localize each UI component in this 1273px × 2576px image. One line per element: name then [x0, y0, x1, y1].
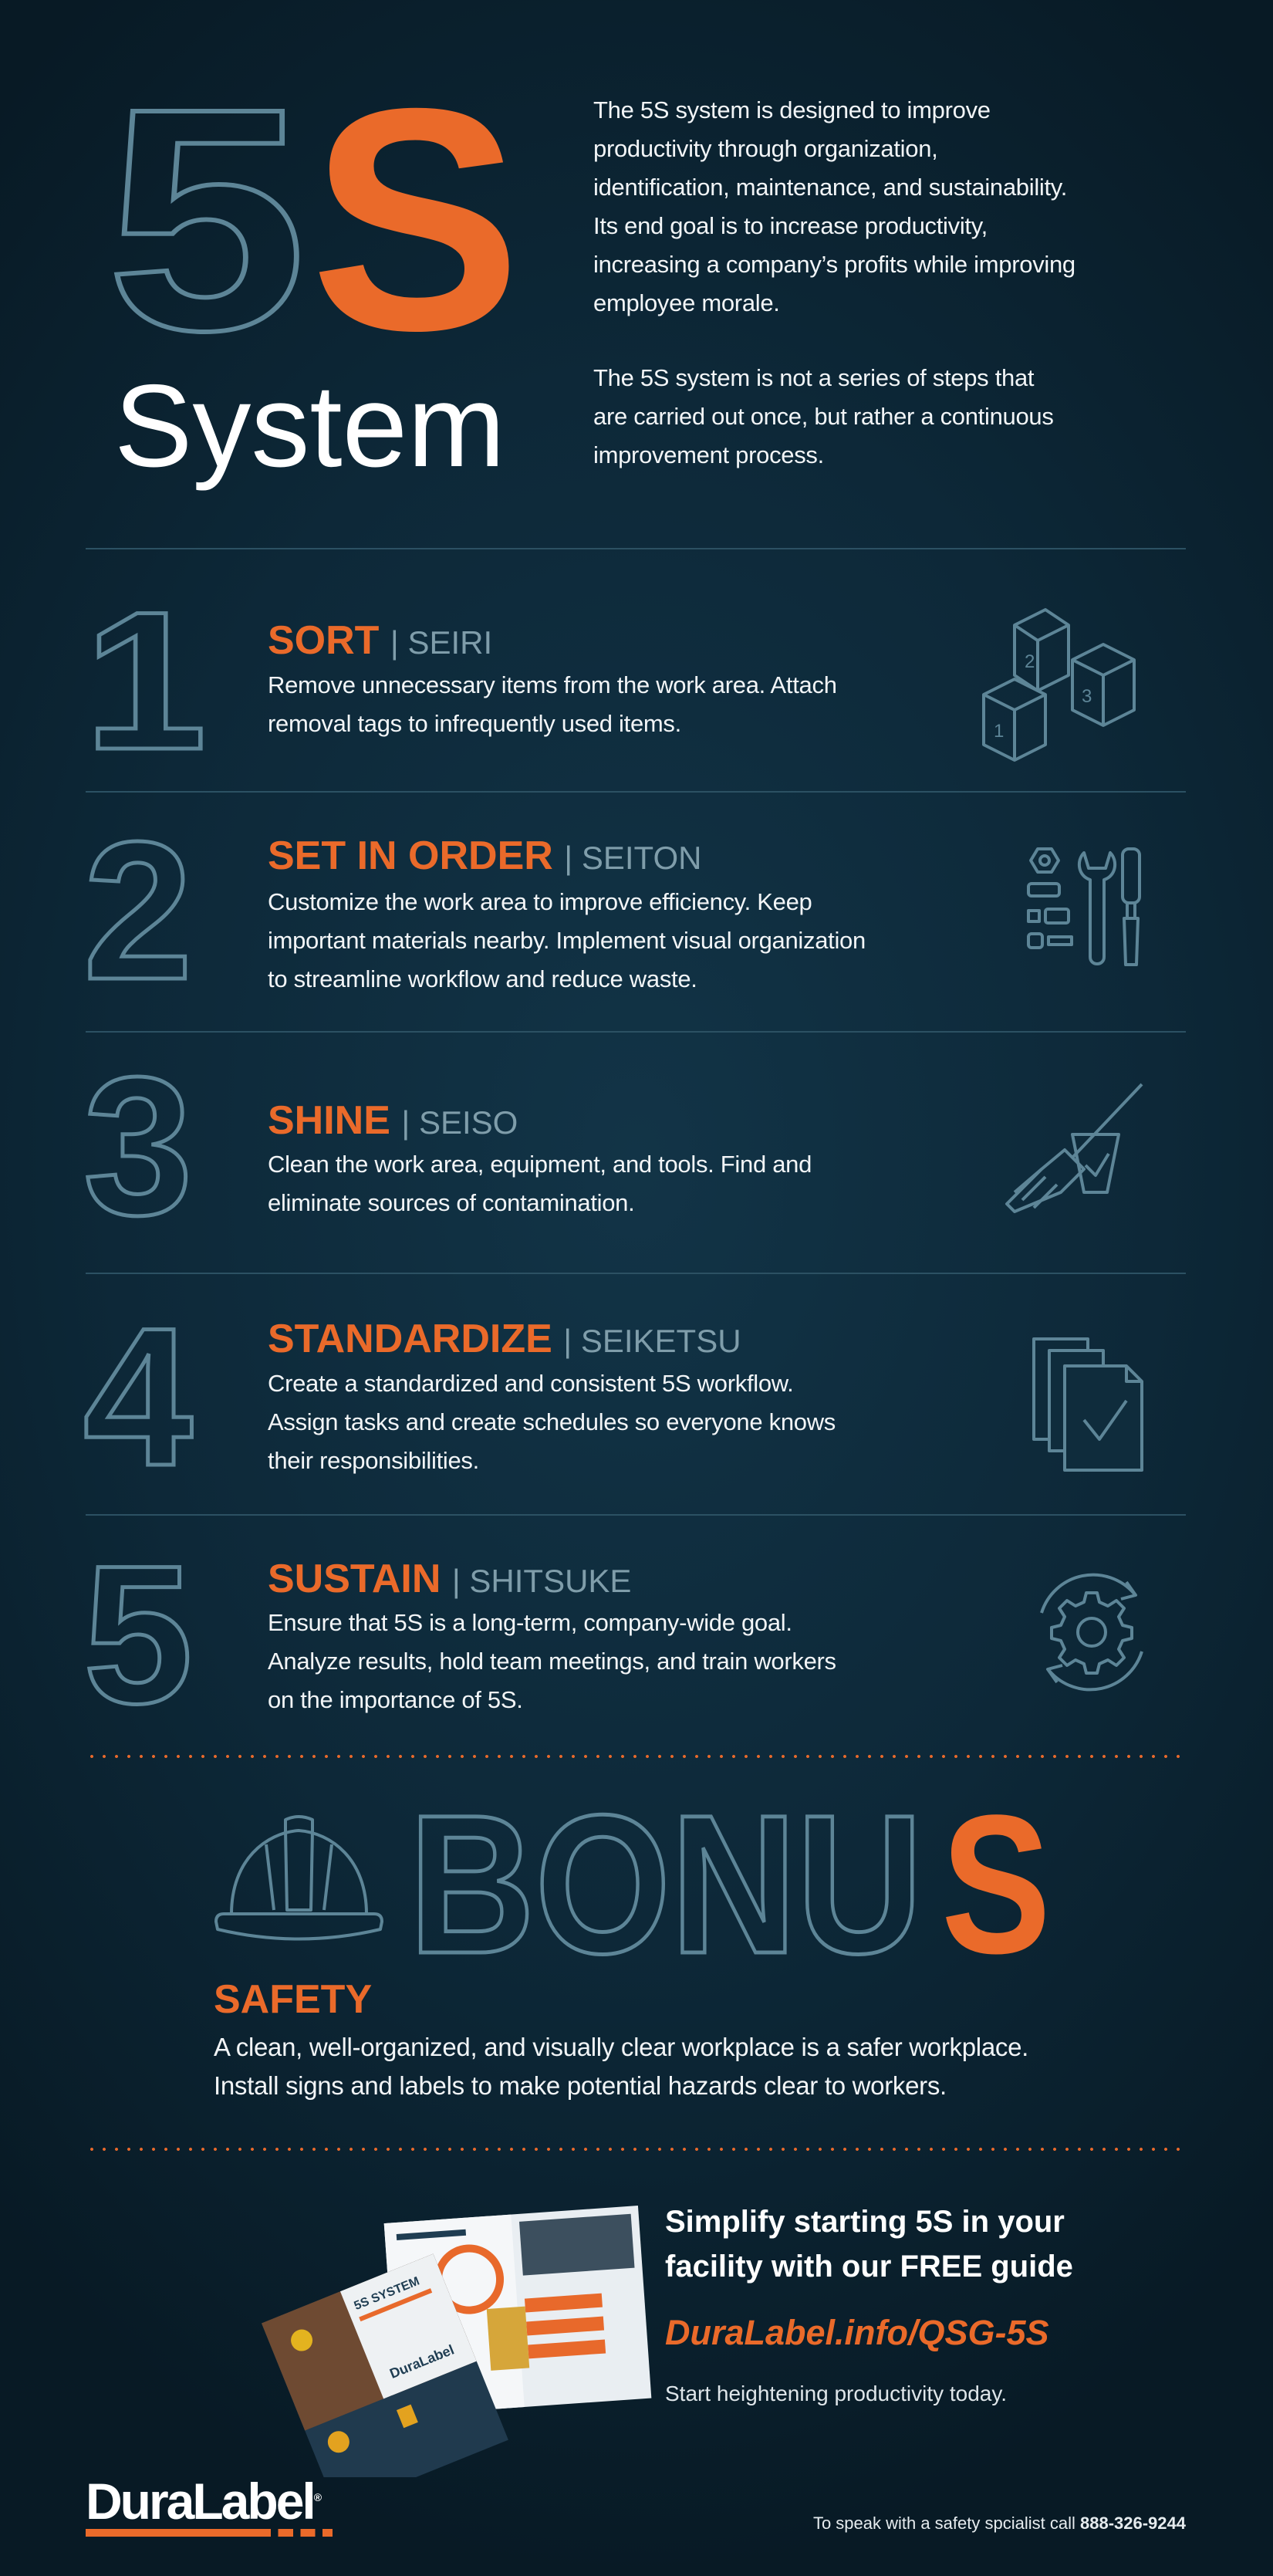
image: guide brochure: 5S SYSTEM	[353, 2275, 421, 2313]
row 2: set in order	[83, 826, 1141, 1003]
text: sort: removal tags to infrequently used items.	[268, 710, 681, 737]
footer contact: To speak with a safety spcialist call 888-326-9244	[813, 2513, 1186, 2533]
cta link: DuraLabel.info/QSG-5S	[665, 2313, 1049, 2352]
icon: tools	[1027, 847, 1141, 966]
title: 5S	[106, 77, 521, 340]
text: set in order: to streamline workflow and reduce waste.	[268, 965, 697, 992]
text: sustain: Analyze results, hold team meetings, and train workers	[268, 1648, 836, 1675]
icon: broom and dustpan	[1005, 1083, 1143, 1213]
text: safety: Install signs and labels to make potential hazards clear to workers.	[214, 2071, 947, 2100]
row 5: sustain	[83, 1551, 1143, 1729]
intro text	[593, 96, 1075, 316]
text: safety	[214, 2033, 1028, 2100]
heading: standardize: STANDARDIZE | SEIKETSU	[268, 1317, 741, 1361]
text: standardize: their responsibilities.	[268, 1447, 479, 1474]
icon: documents	[1032, 1337, 1143, 1472]
text: set in order: important materials nearby. Implement visual organization	[268, 927, 866, 954]
intro text 2	[593, 364, 1054, 468]
intro text 2: The 5S system is not a series of steps that	[593, 364, 1034, 391]
cta subtext: Start heightening productivity today.	[665, 2382, 1007, 2405]
text: sort	[268, 671, 837, 737]
icon: boxes: 1	[994, 721, 1004, 742]
logo: DuraLabel: DuraLabel®	[86, 2473, 322, 2530]
title: System: System	[114, 360, 505, 492]
text: set in order	[268, 888, 866, 992]
text: standardize	[268, 1370, 836, 1474]
intro text: productivity through organization,	[593, 135, 937, 162]
text: sustain: on the importance of 5S.	[268, 1686, 523, 1713]
heading: sustain: SUSTAIN | SHITSUKE	[268, 1557, 631, 1601]
heading: shine: SHINE | SEISO	[268, 1098, 518, 1143]
text: shine: Clean the work area, equipment, and tools. Find and	[268, 1151, 812, 1178]
text: sustain: Ensure that 5S is a long-term, company-wide goal.	[268, 1609, 792, 1636]
cta heading	[665, 2205, 1073, 2284]
intro text: identification, maintenance, and sustainability.	[593, 174, 1067, 201]
row 4: standardize	[83, 1304, 1143, 1482]
icon: boxes: 3	[1082, 686, 1092, 707]
heading: safety: SAFETY	[214, 1977, 372, 2022]
heading: set in order: SET IN ORDER | SEITON	[268, 833, 701, 878]
bonus section	[214, 1798, 1051, 2100]
text: shine: eliminate sources of contamination.	[268, 1189, 634, 1216]
intro text 2: improvement process.	[593, 441, 824, 468]
text: shine	[268, 1151, 812, 1216]
intro text: employee morale.	[593, 289, 780, 316]
intro text: increasing a company’s profits while improving	[593, 251, 1075, 278]
image: guide brochure: DuraLabel	[387, 2341, 456, 2382]
text: set in order: Customize the work area to improve efficiency. Keep	[268, 888, 812, 915]
icon: gear cycle	[1040, 1573, 1143, 1692]
text: sustain	[268, 1609, 836, 1713]
image: guide brochure	[262, 2206, 651, 2477]
cta heading: Simplify starting 5S in your	[665, 2205, 1065, 2239]
intro text 2: are carried out once, but rather a continuous	[593, 403, 1054, 430]
intro text: Its end goal is to increase productivity,	[593, 212, 988, 239]
intro text: The 5S system is designed to improve	[593, 96, 991, 123]
heading: sort: SORT | SEIRI	[268, 618, 492, 663]
text: standardize: Create a standardized and consistent 5S workflow.	[268, 1370, 793, 1397]
icon: boxes	[982, 608, 1136, 762]
cta heading: facility with our FREE guide	[665, 2250, 1073, 2284]
text: sort: Remove unnecessary items from the work area. Attach	[268, 671, 837, 698]
text: standardize: Assign tasks and create schedules so everyone knows	[268, 1408, 836, 1435]
text: safety: A clean, well-organized, and visually clear workplace is a safer workplace.	[214, 2033, 1028, 2061]
icon: hard hat	[214, 1815, 383, 1940]
icon: boxes: 2	[1025, 651, 1035, 672]
row 3: shine	[83, 1065, 1143, 1242]
row 1: sort	[84, 594, 1136, 772]
